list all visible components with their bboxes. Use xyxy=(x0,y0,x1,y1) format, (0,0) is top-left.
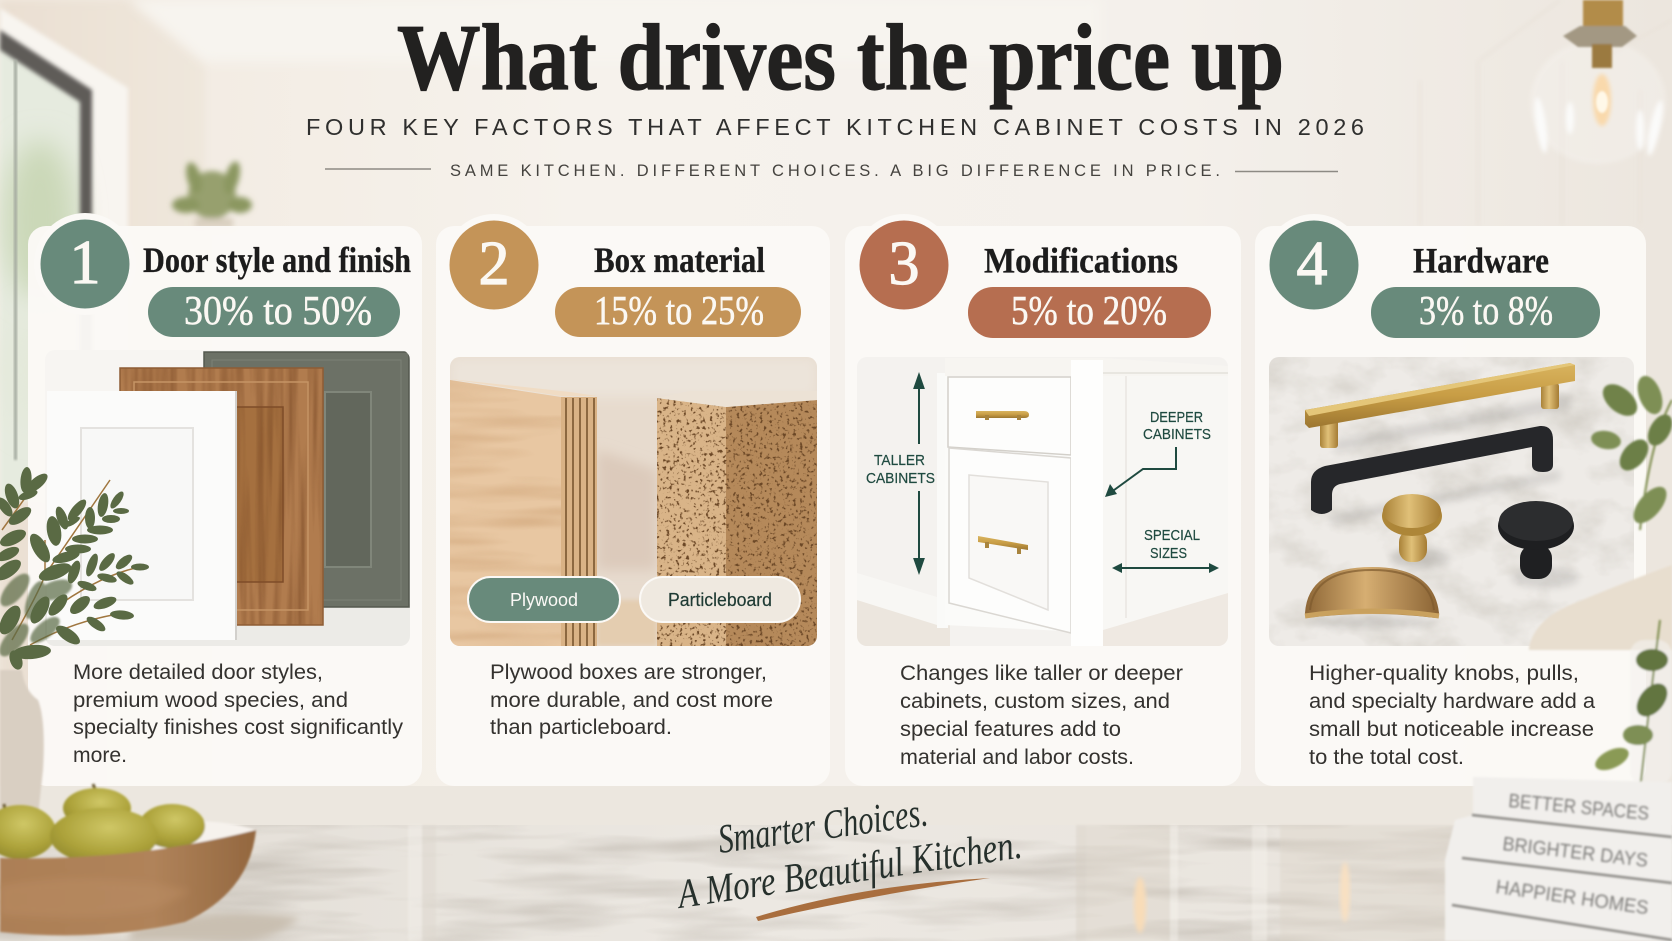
description: Plywood boxes are stronger, xyxy=(490,661,767,684)
percentage pill xyxy=(968,287,1211,338)
photo: plywood and particleboard xyxy=(450,357,817,646)
description xyxy=(900,662,1183,769)
callout: special sizes xyxy=(1112,527,1219,573)
callout: deeper cabinets: DEEPER xyxy=(1150,409,1203,426)
right plant in glass vase xyxy=(1590,372,1672,790)
closing script message: Smarter Choices. xyxy=(715,788,930,862)
pendant lamp xyxy=(1530,0,1666,164)
callout: taller cabinets: TALLER xyxy=(874,452,925,469)
black pull xyxy=(1311,426,1553,514)
title: What drives the price up xyxy=(397,6,1284,110)
callout: taller cabinets: CABINETS xyxy=(866,470,935,487)
pear xyxy=(50,808,158,864)
badge: 4 xyxy=(1263,214,1365,316)
percentage pill: 30% to 50% xyxy=(184,287,372,333)
book title: HAPPIER HOMES xyxy=(1494,877,1650,919)
label: Particleboard: Particleboard xyxy=(668,590,772,610)
label: Plywood: Plywood xyxy=(510,590,578,610)
description: and specialty hardware add a xyxy=(1309,690,1595,713)
header xyxy=(306,6,1364,180)
callout: deeper cabinets xyxy=(1105,409,1211,497)
plant sprig left xyxy=(0,467,149,671)
panel: box material xyxy=(436,214,830,786)
cup pull xyxy=(1305,567,1439,618)
photo: handles and knobs xyxy=(1269,357,1634,646)
tagline: SAME KITCHEN. DIFFERENT CHOICES. A BIG DIFFERENCE IN PRICE. xyxy=(450,162,1220,180)
badge: 1: 1 xyxy=(70,229,100,297)
description: more durable, and cost more xyxy=(490,689,773,712)
heading: Hardware xyxy=(1413,240,1549,280)
badge: 4: 4 xyxy=(1296,230,1328,298)
heading: Modifications xyxy=(984,240,1178,280)
towel xyxy=(1529,565,1672,650)
pear xyxy=(139,804,205,848)
book title: BRIGHTER DAYS xyxy=(1501,834,1649,872)
badge: 2 xyxy=(443,214,545,316)
heading: Box material xyxy=(594,240,765,280)
description: cabinets, custom sizes, and xyxy=(900,690,1170,713)
photo: cabinet door samples xyxy=(45,350,410,646)
closing script message xyxy=(672,788,1025,921)
subtitle: FOUR KEY FACTORS THAT AFFECT KITCHEN CABINET COSTS IN 2026 xyxy=(306,114,1364,140)
description: material and labor costs. xyxy=(900,746,1134,769)
percentage pill: 3% to 8% xyxy=(1419,287,1553,333)
bowl shadow xyxy=(130,914,300,941)
closing script message: A More Beautiful Kitchen. xyxy=(672,821,1025,917)
description: than particleboard. xyxy=(490,716,672,739)
brush underline xyxy=(756,878,990,921)
badge: 3 xyxy=(853,214,955,316)
description: premium wood species, and xyxy=(73,689,348,712)
percentage pill: 5% to 20% xyxy=(1011,287,1167,333)
description: Higher-quality knobs, pulls, xyxy=(1309,662,1579,685)
book title: BETTER SPACES xyxy=(1508,791,1650,825)
badge: 2: 2 xyxy=(478,230,510,298)
vase left xyxy=(0,670,44,830)
label: Plywood xyxy=(468,577,620,622)
callout: special sizes: SPECIAL xyxy=(1144,527,1200,544)
heading: Door style and finish xyxy=(143,240,411,280)
gold bar pull xyxy=(1305,363,1575,448)
panel: door style and finish xyxy=(28,213,422,786)
badge: 1 xyxy=(34,213,136,315)
label: Particleboard xyxy=(640,577,800,622)
pear xyxy=(0,804,56,859)
black knob xyxy=(1498,501,1574,579)
description: more. xyxy=(73,744,127,767)
callout: deeper cabinets: CABINETS xyxy=(1143,426,1211,443)
pear xyxy=(63,784,131,828)
panel: modifications xyxy=(845,214,1241,786)
description: special features add to xyxy=(900,718,1121,741)
callout: taller cabinets xyxy=(866,375,935,572)
description xyxy=(73,661,404,767)
callout: special sizes: SIZES xyxy=(1150,545,1187,562)
description xyxy=(1309,662,1595,769)
description: More detailed door styles, xyxy=(73,661,323,684)
counter and wall strip xyxy=(0,786,1672,941)
stacked books xyxy=(1445,777,1672,941)
panel: hardware xyxy=(1255,214,1646,786)
gold knob xyxy=(1382,494,1442,562)
badge: 3: 3 xyxy=(888,230,920,298)
description: Changes like taller or deeper xyxy=(900,662,1183,685)
fruit bowl xyxy=(0,784,256,935)
percentage pill: 15% to 25% xyxy=(594,287,764,333)
percentage pill xyxy=(1371,287,1600,338)
description: specialty finishes cost significantly xyxy=(73,716,404,739)
photo: cabinet with dimension callouts xyxy=(857,357,1228,646)
description: to the total cost. xyxy=(1309,746,1464,769)
description: small but noticeable increase xyxy=(1309,718,1594,741)
description xyxy=(490,661,773,739)
